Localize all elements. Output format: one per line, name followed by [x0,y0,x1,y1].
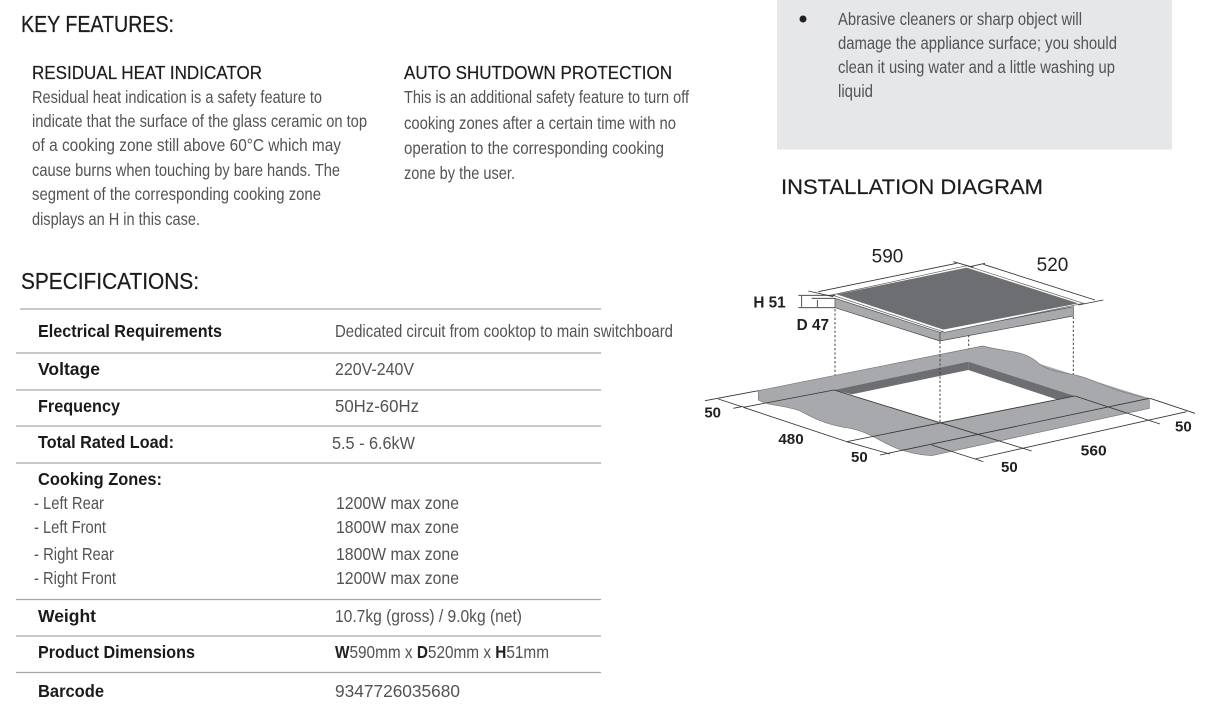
row: total rated load: Total Rated Load: [38,432,174,452]
row: electrical requirements: Electrical Requirements [38,321,222,341]
text: cleaning advice [838,9,1117,101]
heading: specifications: SPECIFICATIONS: [21,268,199,294]
body text: residual heat description: indicate that the surface of the glass ceramic on top [32,111,367,131]
dimension labels: 50 [1175,419,1192,436]
body text: residual heat description [32,87,367,229]
dimension labels: 480 [778,431,804,448]
row: total rated load [38,432,415,453]
row: barcode [38,681,460,701]
row: cooking zones [34,469,459,588]
dimension labels: 50 [704,405,721,422]
row: electrical requirements: Dedicated circuit from cooktop to main switchboard [335,321,673,341]
chart: installation diagram [704,247,1195,476]
dimension labels: 50 [851,449,868,466]
body text: residual heat description: segment of the corresponding cooking zone [32,184,321,204]
row: voltage: Voltage [38,359,100,379]
row: cooking zones: - Right Front [34,568,116,588]
row: voltage [38,359,414,379]
dimension labels: 520 [1037,255,1068,276]
heading: installation diagram: INSTALLATION DIAGRAM [781,176,1043,199]
row: barcode: 9347726035680 [335,681,460,701]
cutout benchtop [758,346,1149,456]
body text: auto shutdown description: operation to the corresponding cooking [404,138,664,158]
body text: residual heat description: displays an H in this case. [32,209,200,229]
body text: residual heat description: cause burns when touching by bare hands. The [32,160,340,180]
row: barcode: Barcode [38,681,104,701]
dimension labels [704,247,1192,476]
body text: residual heat description: Residual heat indication is a safety feature to [32,87,322,107]
row: frequency [38,396,419,416]
dimension lines [705,262,1195,462]
row: total rated load: 5.5 - 6.6kW [332,433,415,453]
dimension labels: 590 [872,247,903,268]
row: cooking zones: - Left Rear [34,493,104,513]
panel: care note [777,0,1172,150]
text block: residual heat indicator [32,62,367,229]
row: cooking zones: 1200W max zone [336,493,459,513]
row: weight [38,606,522,626]
dimension labels: H 51 [753,295,786,312]
row: product dimensions: W590mm x D520mm x H51mm [335,642,549,662]
row: product dimensions [38,642,549,662]
row: frequency: 50Hz-60Hz [335,396,419,416]
text: cleaning advice: clean it using water and a little washing up [838,57,1115,77]
row: cooking zones: 1800W max zone [336,544,459,564]
body text: residual heat description: of a cooking zone still above 60°C which may [32,135,341,155]
row: frequency: Frequency [38,396,120,416]
row: cooking zones: 1200W max zone [336,568,459,588]
row: cooking zones: 1800W max zone [336,517,459,537]
table: specifications [16,309,673,701]
row: cooking zones: Cooking Zones: [38,469,162,489]
body text: auto shutdown description: This is an additional safety feature to turn off [404,87,689,107]
row: voltage: 220V-240V [335,359,414,379]
cooktop [832,266,1083,341]
row: product dimensions: Product Dimensions [38,642,195,662]
subheading: auto shutdown protection: AUTO SHUTDOWN PROTECTION [404,62,672,83]
dimension labels: 560 [1081,443,1107,460]
text: cleaning advice: Abrasive cleaners or sharp object will [838,9,1082,29]
guide lines [835,309,1073,422]
dimension labels: D 47 [797,317,829,334]
row: weight: 10.7kg (gross) / 9.0kg (net) [335,606,522,626]
text block: auto shutdown protection [404,62,689,183]
row: cooking zones: - Left Front [34,517,106,537]
body text: auto shutdown description: zone by the user. [404,163,515,183]
text: cleaning advice: damage the appliance surface; you should [838,33,1117,53]
icon: bullet [800,16,806,22]
body text: auto shutdown description: cooking zones after a certain time with no [404,113,676,133]
text: cleaning advice: liquid [838,81,873,101]
dimension labels: 50 [1001,459,1018,476]
body text: auto shutdown description [404,87,689,183]
row: weight: Weight [38,606,96,626]
row: cooking zones: - Right Rear [34,544,114,564]
heading: key features: KEY FEATURES: [21,11,174,37]
row: electrical requirements [38,321,673,341]
subheading: residual heat indicator: RESIDUAL HEAT INDICATOR [32,62,262,83]
